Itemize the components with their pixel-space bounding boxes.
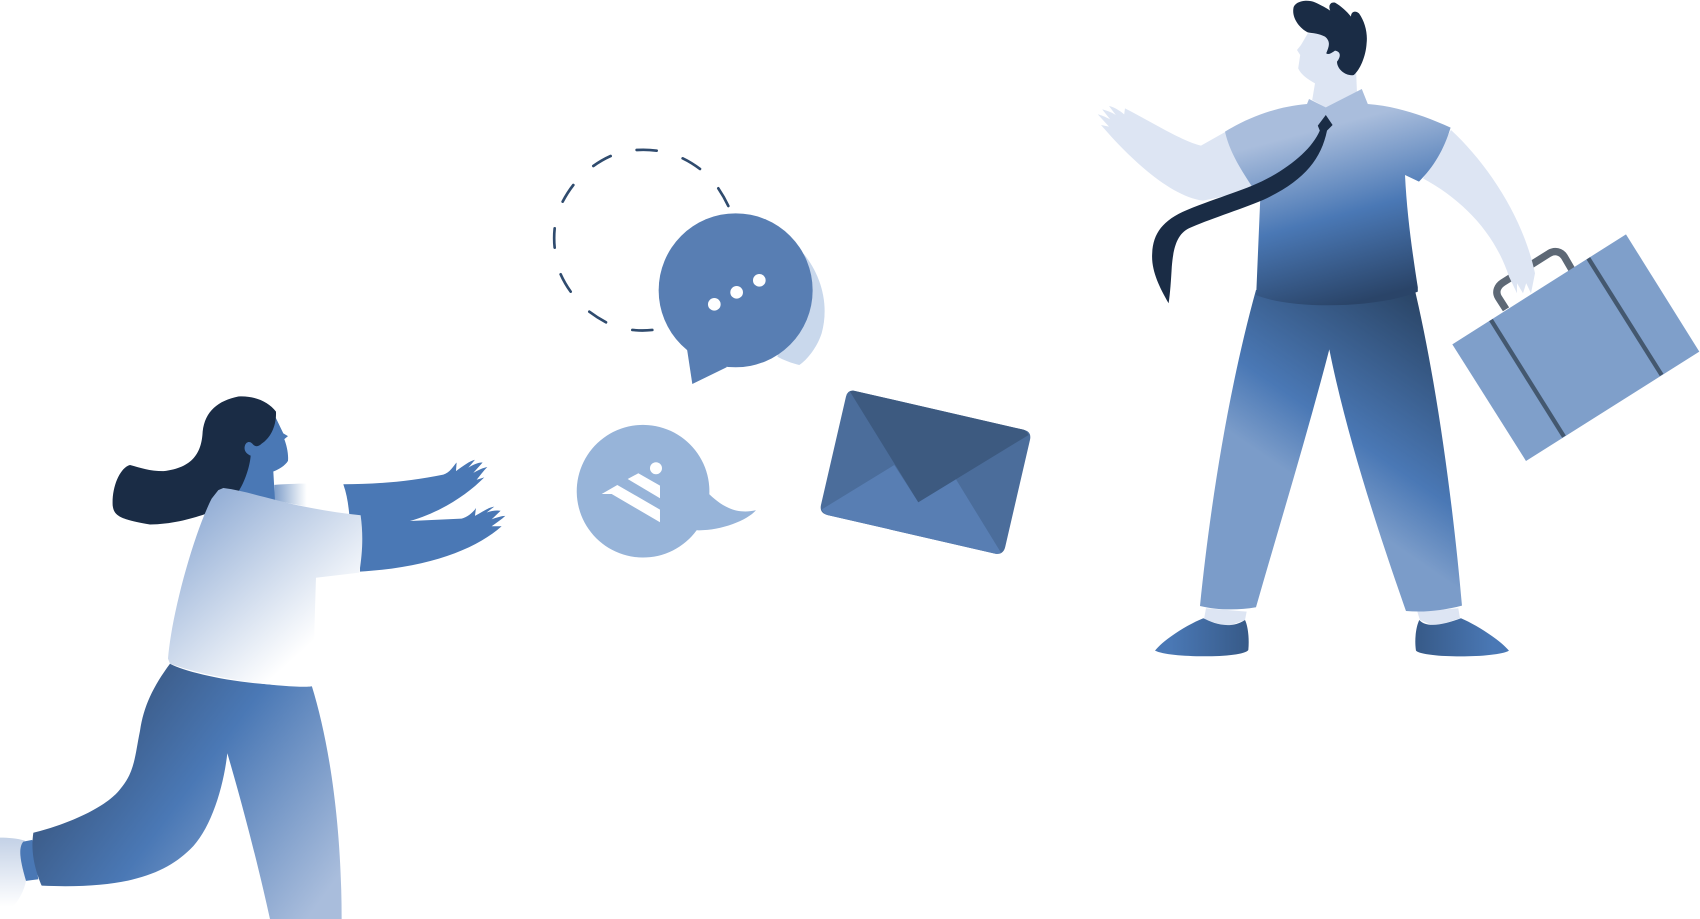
socks	[1204, 608, 1247, 627]
woman trousers	[32, 664, 342, 919]
envelope body	[821, 391, 1030, 554]
chat bubble with dots	[659, 213, 825, 384]
woman shirt	[168, 488, 362, 687]
dashed circle	[554, 150, 728, 330]
chat bubble with logo mark	[577, 425, 756, 558]
trousers	[1200, 283, 1462, 612]
right shoe	[1415, 618, 1509, 656]
man trousers and shoes	[1155, 283, 1509, 656]
man face and neck	[1297, 33, 1357, 107]
envelope	[821, 391, 1030, 554]
woman back sleeve	[274, 484, 349, 515]
envelope top flap	[850, 391, 1029, 502]
bubble body and tail	[577, 425, 756, 558]
man raised arm	[1098, 106, 1255, 201]
man tie	[1152, 115, 1333, 303]
woman figure	[0, 396, 505, 919]
woman back arm	[343, 460, 487, 524]
briefcase handle	[1497, 252, 1572, 309]
logo mark	[602, 462, 662, 522]
man lowered arm	[1423, 130, 1535, 293]
typing dots	[708, 274, 766, 311]
woman back foot	[0, 838, 38, 918]
man hair	[1293, 1, 1367, 75]
envelope lower flap	[822, 465, 1001, 554]
woman hair	[113, 396, 276, 524]
man figure	[1098, 1, 1699, 656]
woman face and neck	[238, 416, 288, 500]
briefcase	[1452, 234, 1699, 461]
main bubble	[659, 213, 813, 384]
man shirt	[1225, 89, 1451, 305]
bubble shadow	[777, 253, 825, 365]
left shoe	[1155, 618, 1249, 656]
woman front arm	[360, 507, 505, 572]
briefcase body	[1452, 234, 1699, 461]
briefcase straps	[1491, 258, 1662, 437]
